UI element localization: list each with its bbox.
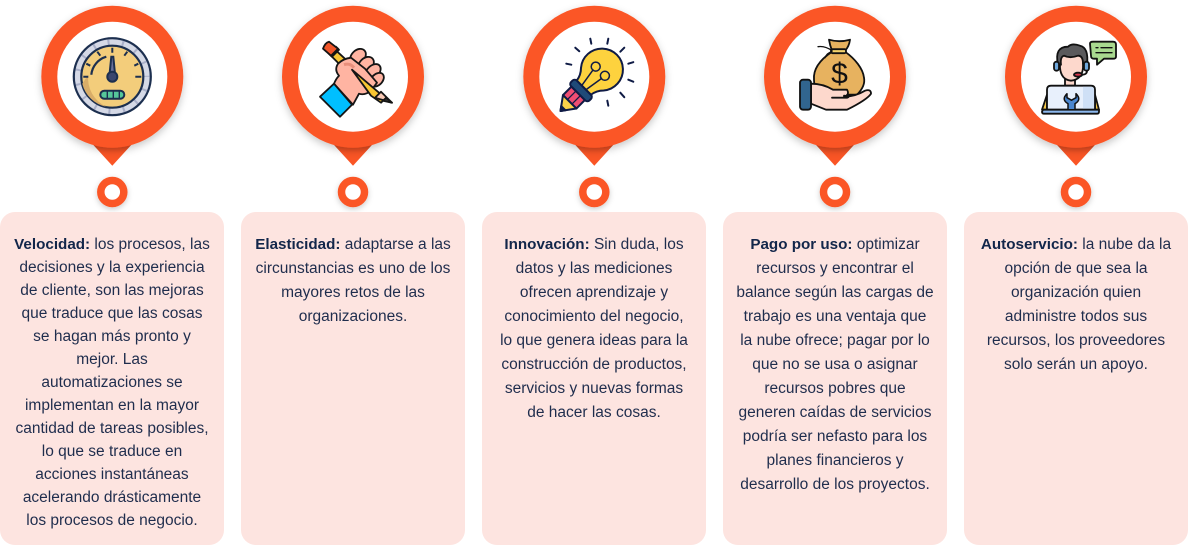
pin 1: velocidad — [41, 6, 183, 204]
card: pago por uso: generen caídas de servicios — [738, 404, 932, 420]
card: velocidad: los procesos de negocio. — [26, 512, 198, 529]
dollar sign: $ — [831, 58, 848, 91]
card: innovacion — [482, 212, 706, 545]
pins and icons row — [38, 5, 1151, 212]
card: velocidad: implementan en la mayor — [25, 397, 199, 414]
card: pago por uso: recursos y encontrar el — [756, 260, 914, 276]
card: velocidad: acelerando drásticamente — [23, 489, 201, 506]
card: velocidad: que traduce que las cosas — [22, 305, 202, 322]
card: autoservicio: administre todos sus — [1005, 308, 1147, 324]
card: autoservicio: opción de que sea la — [1004, 260, 1148, 276]
icon: speedometer gauge — [74, 38, 151, 115]
pin 3: innovacion — [523, 6, 665, 204]
icon: money bag on hand — [800, 40, 871, 110]
pin 4: pago por uso — [764, 6, 906, 204]
icon: support agent with laptop — [1042, 42, 1116, 114]
card: velocidad: cantidad de tareas posibles, — [15, 420, 209, 437]
card: elasticidad: Elasticidad: adaptarse a las — [255, 236, 451, 252]
card: pago por uso: desarrollo de los proyectos. — [740, 476, 930, 492]
card: autoservicio — [964, 212, 1188, 545]
card: pago por uso: trabajo es una ventaja que — [744, 308, 926, 324]
card: pago por uso: recursos pobres que — [764, 380, 906, 396]
card: velocidad: automatizaciones se — [41, 374, 183, 391]
pin 2: elasticidad — [282, 6, 424, 204]
card: innovacion: datos y las mediciones — [516, 260, 672, 276]
card: innovacion: ofrecen aprendizaje y — [520, 284, 668, 300]
card: velocidad: acciones instantáneas — [35, 466, 189, 483]
card: pago por uso: la nube ofrece; pagar por lo — [740, 332, 930, 348]
card: autoservicio: solo serán un apoyo. — [1004, 356, 1148, 372]
card: elasticidad: mayores retos de las — [281, 284, 425, 300]
card: pago por uso — [723, 212, 947, 545]
icon: hand holding pencil — [320, 42, 392, 117]
card: pago por uso: planes financieros y — [766, 452, 904, 468]
card: innovacion: de hacer las cosas. — [527, 404, 661, 420]
card: velocidad: se hagan más pronto y — [33, 328, 191, 345]
card: pago por uso: balance según las cargas de — [736, 284, 934, 300]
card: innovacion: construcción de productos, — [501, 356, 687, 372]
card: pago por uso: que no se usa o asignar — [752, 356, 918, 372]
card: elasticidad — [241, 212, 465, 545]
card: pago por uso: podría ser nefasto para los — [743, 428, 927, 444]
icon: light bulb pencil — [546, 39, 633, 126]
card: pago por uso: Pago por uso: optimizar — [750, 236, 920, 252]
card: innovacion: servicios y nuevas formas — [505, 380, 683, 396]
card: velocidad: de cliente, son las mejoras — [20, 282, 204, 299]
card: velocidad: lo que se traduce en — [42, 443, 182, 460]
card: innovacion: lo que genera ideas para la — [500, 332, 688, 348]
card: velocidad — [0, 212, 224, 545]
pin 5: autoservicio — [1005, 6, 1147, 204]
card: velocidad: Velocidad: los procesos, las — [14, 236, 210, 253]
card: velocidad: mejor. Las — [76, 351, 148, 368]
card: autoservicio: Autoservicio: la nube da la — [981, 236, 1171, 252]
card: innovacion: conocimiento del negocio, — [504, 308, 684, 324]
card: autoservicio: recursos, los proveedores — [987, 332, 1165, 348]
card: elasticidad: organizaciones. — [299, 308, 407, 324]
card: innovacion: Innovación: Sin duda, los — [504, 236, 684, 252]
card: elasticidad: circunstancias es uno de los — [256, 260, 450, 276]
card: autoservicio: organización quien — [1011, 284, 1141, 300]
card: velocidad: decisiones y la experiencia — [19, 259, 205, 276]
